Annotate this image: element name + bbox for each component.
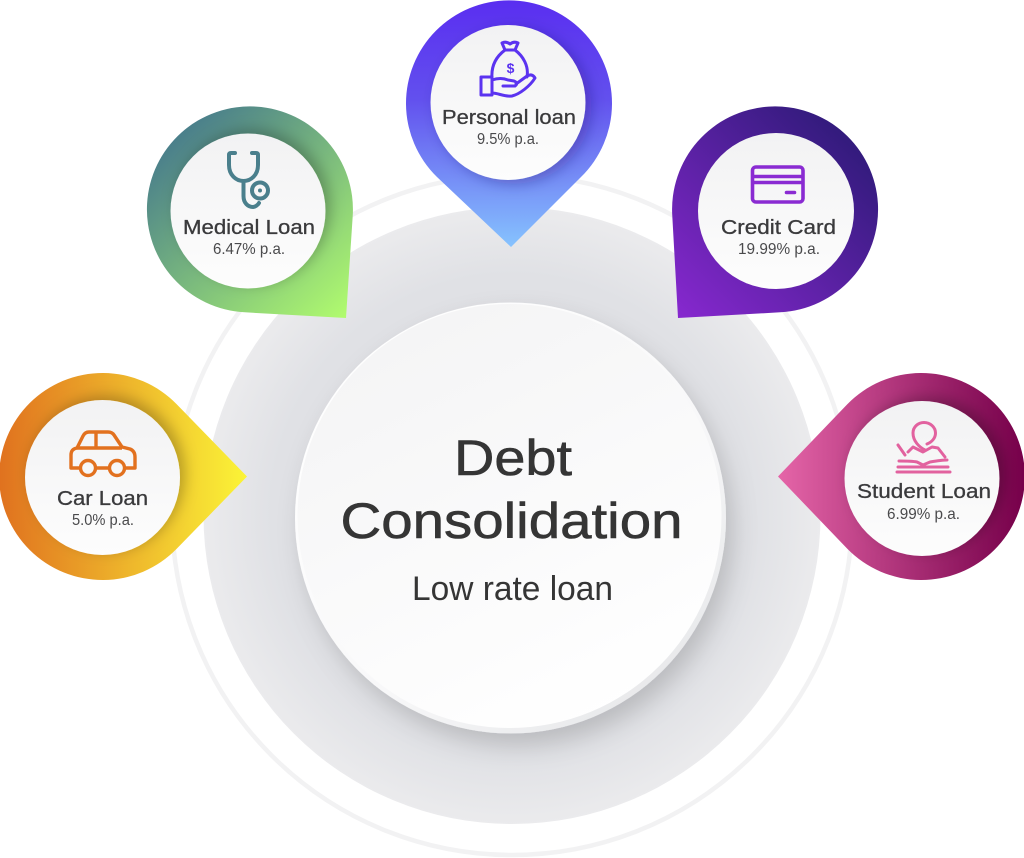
- central subtitle: Low rate loan: [412, 570, 613, 608]
- pin: credit card: [672, 106, 878, 318]
- inner circle: [698, 133, 854, 289]
- pin shape: [0, 373, 247, 580]
- central title second line: Consolidation: [340, 493, 682, 549]
- label: Personal loan: [442, 107, 576, 129]
- circle base with rim: [295, 302, 726, 734]
- inner circle: [844, 401, 1000, 556]
- circle face: [298, 304, 722, 728]
- pin: medical loan: [147, 106, 353, 318]
- pin: personal loan: [406, 0, 612, 247]
- rate: 6.47% p.a.: [213, 241, 285, 258]
- outer ring: [172, 175, 852, 855]
- pin shape: [778, 373, 1024, 580]
- rate: 9.5% p.a.: [477, 131, 539, 148]
- pin shape: [406, 0, 612, 247]
- label: Credit Card: [721, 217, 836, 239]
- label: Student Loan: [857, 481, 991, 503]
- inner circle: [25, 400, 180, 555]
- pin shape: [672, 106, 878, 318]
- icon: money bag in hand: [481, 42, 535, 96]
- icon: credit card: [752, 167, 803, 202]
- rate: 19.99% p.a.: [738, 241, 820, 258]
- dollar sign: $: [507, 60, 515, 76]
- inner circle: [170, 134, 326, 288]
- label: Medical Loan: [183, 217, 315, 239]
- central circle: [295, 302, 726, 734]
- icon: car: [71, 432, 135, 476]
- rate: 5.0% p.a.: [72, 512, 134, 529]
- gray disc: [204, 207, 820, 824]
- pin shape: [147, 106, 353, 318]
- icon: stethoscope: [229, 153, 268, 207]
- pin: car loan: [0, 373, 247, 580]
- rate: 6.99% p.a.: [887, 506, 960, 523]
- pin: student loan: [778, 373, 1024, 580]
- icon: student reading: [897, 422, 950, 472]
- label: Car Loan: [57, 488, 148, 510]
- central title: Debt: [454, 430, 572, 486]
- inner circle: [430, 25, 586, 180]
